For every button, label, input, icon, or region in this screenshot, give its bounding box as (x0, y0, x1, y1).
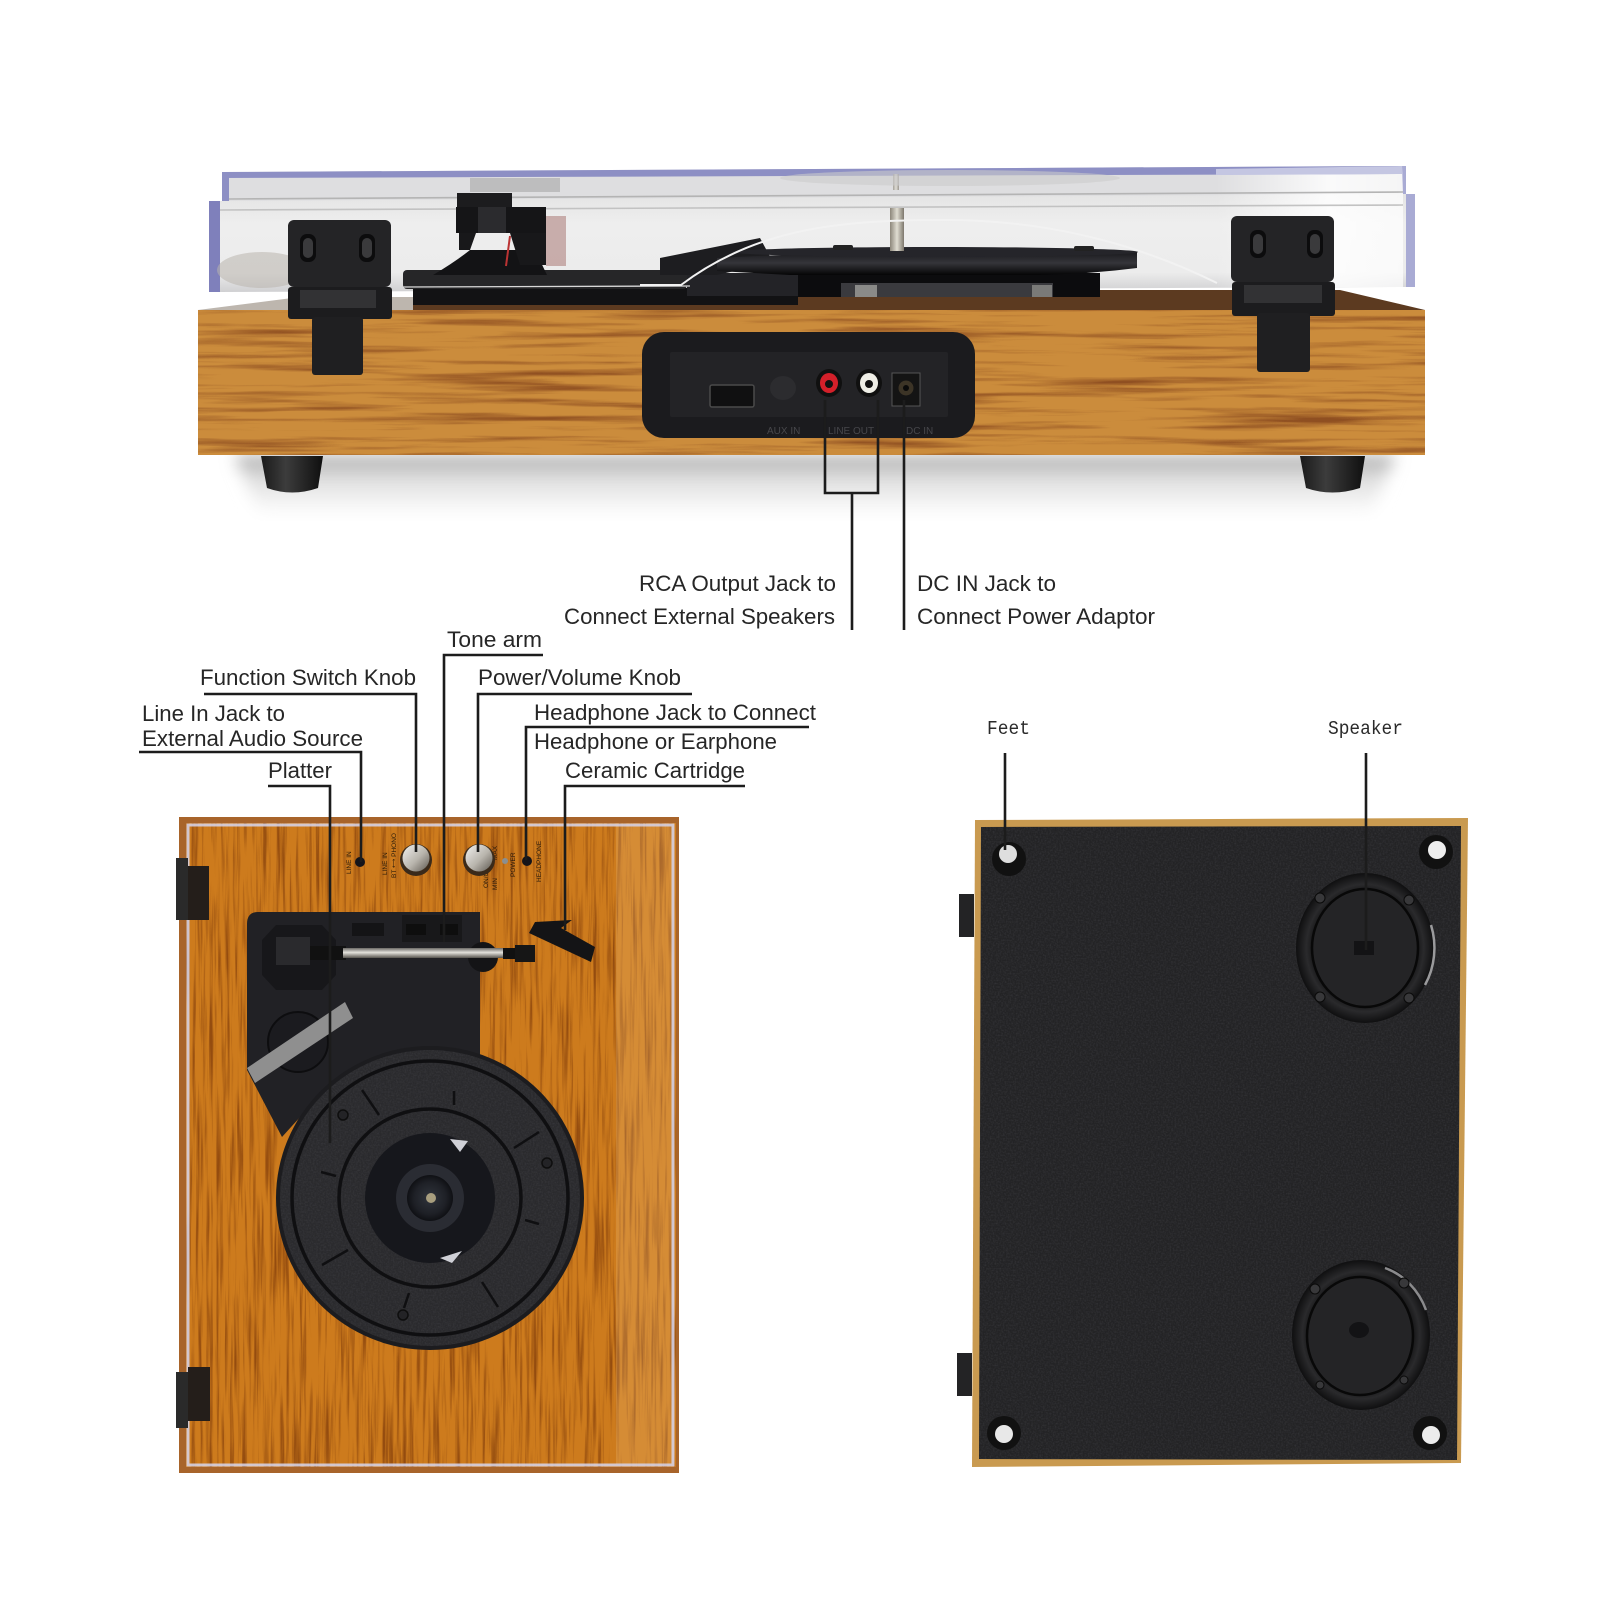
control labels: HEADPHONE (536, 840, 543, 882)
callout: DC in (904, 400, 1155, 630)
callout: ceramic cartridge (565, 758, 745, 930)
tonearm base and cartridge (403, 193, 798, 305)
power volume knob (463, 844, 495, 876)
platter side view (717, 208, 1138, 297)
speaker bottom (1292, 1260, 1430, 1410)
callout: headphone jack: Headphone Jack to Connect (534, 700, 816, 725)
callout: platter: Platter (268, 758, 332, 783)
black base (979, 826, 1461, 1460)
callout: RCA output: Connect External Speakers (564, 604, 835, 629)
callout: power volume knob (478, 665, 692, 852)
speaker top (1296, 873, 1434, 1023)
callout: headphone jack: Headphone or Earphone (534, 729, 777, 754)
left hinge (288, 220, 392, 375)
line in jack (355, 857, 365, 867)
power LED (502, 858, 508, 864)
grey strip (247, 1002, 353, 1083)
control labels: ON/OFF (483, 863, 490, 888)
anti-skate circle (268, 1012, 328, 1072)
control labels: BT ⟷ PHONO (391, 833, 398, 878)
right foot (1300, 456, 1365, 492)
control labels: LINE IN (382, 852, 389, 875)
control labels (346, 833, 543, 890)
lid left hinge top (176, 858, 209, 920)
control labels: MIN (492, 878, 499, 890)
platter hub (365, 1133, 495, 1263)
callout: headphone jack (526, 700, 816, 860)
floor shadow (235, 456, 1395, 515)
rear connection panel: AUX IN (767, 426, 800, 437)
plate cutouts (352, 915, 462, 942)
ceramic cartridge (529, 920, 595, 962)
lid edge (188, 825, 673, 1465)
function switch knob (400, 844, 432, 876)
callout: power volume knob: Power/Volume Knob (478, 665, 681, 690)
dust cover lid (209, 166, 1415, 292)
left foot (261, 456, 323, 492)
tone arm (262, 925, 535, 990)
headphone jack (522, 856, 532, 866)
callout: feet: Feet (987, 718, 1030, 740)
rear connection panel: LINE OUT (828, 426, 874, 437)
callout: line in jack: External Audio Source (142, 726, 363, 751)
wood frame (972, 818, 1468, 1467)
callout: RCA output (564, 400, 878, 630)
lid reflective band (616, 826, 672, 1464)
side tabs (957, 894, 974, 1396)
platter (276, 1046, 584, 1350)
callout: line in jack: Line In Jack to (142, 701, 285, 726)
callout: DC in: Connect Power Adaptor (917, 604, 1155, 629)
panel: rear view of turntable (198, 166, 1425, 515)
callout: speaker: Speaker (1328, 718, 1403, 740)
callout: feet (987, 718, 1030, 850)
panel: bottom view of turntable (957, 818, 1468, 1467)
lid reflection (780, 170, 1120, 186)
control labels: POWER (510, 852, 517, 877)
callout: tone arm: Tone arm (447, 627, 542, 652)
callout: tone arm (444, 627, 543, 942)
callout: platter (268, 758, 332, 1143)
panel: top view of turntable (176, 817, 679, 1473)
control labels: LINE IN (346, 851, 353, 874)
control labels: MAX (492, 845, 499, 860)
callout: ceramic cartridge: Ceramic Cartridge (565, 758, 745, 783)
tonearm plate (247, 912, 480, 1137)
red RCA jack (816, 369, 842, 397)
lid curved highlight (640, 220, 1217, 285)
callout: DC in: DC IN Jack to (917, 571, 1056, 596)
callout: function switch knob: Function Switch Knob (200, 665, 416, 690)
DC jack (892, 373, 920, 406)
rubber feet (987, 835, 1453, 1450)
usb port (710, 385, 754, 407)
callout: function switch knob (200, 665, 416, 852)
wood top deck (413, 290, 1425, 310)
rear connection panel (642, 332, 975, 438)
wood top (179, 817, 679, 1473)
rear connection panel: DC IN (906, 426, 933, 437)
callout: RCA output: RCA Output Jack to (639, 571, 836, 596)
white RCA jack (856, 369, 882, 397)
wood front panel (198, 310, 1425, 455)
lid left hinge bottom (176, 1367, 210, 1428)
right hinge (1231, 216, 1335, 372)
callout: line in jack (139, 701, 363, 862)
